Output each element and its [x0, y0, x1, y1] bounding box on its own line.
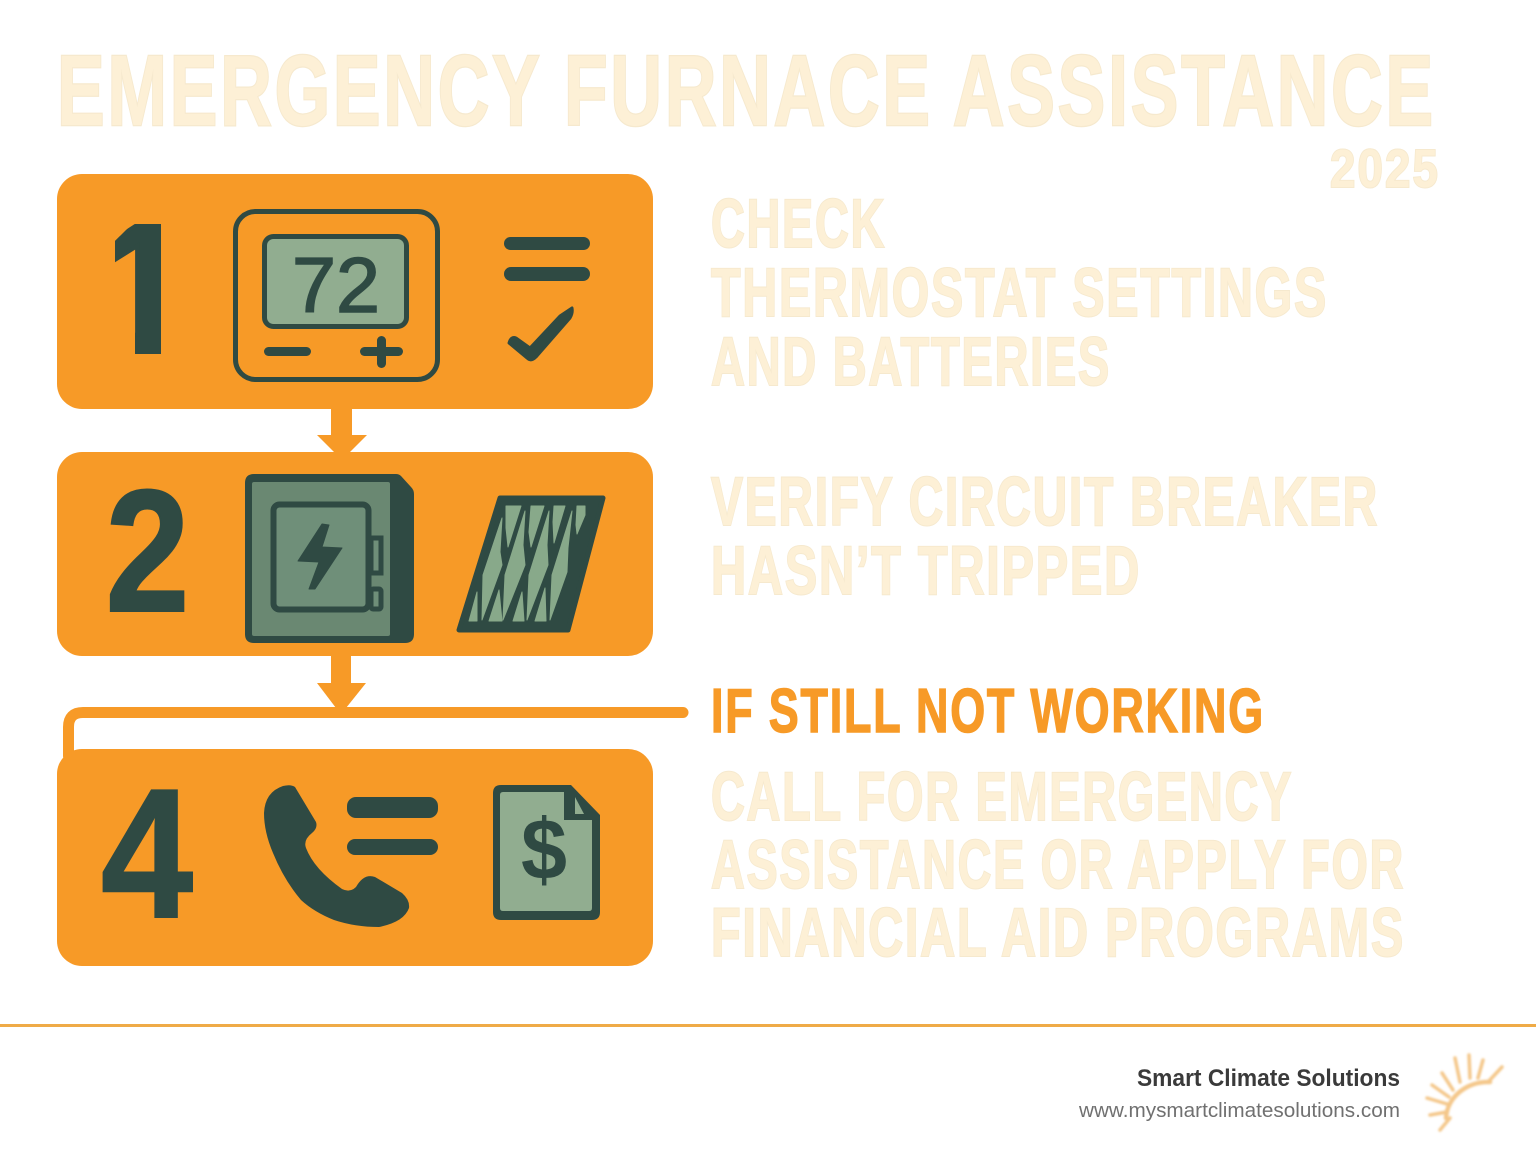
step 2 text: HASN’T TRIPPED [711, 532, 1141, 609]
icon: thermostat: 72 [292, 241, 380, 329]
icon: checklist [504, 237, 590, 360]
panel: step 2 [57, 452, 653, 656]
step 1 text [711, 185, 1328, 400]
step 1 text: AND BATTERIES [711, 323, 1111, 400]
connector line to if still not working [68, 712, 683, 756]
icon: furnace filter [459, 498, 603, 630]
footer website: www.mysmartclimatesolutions.com [1078, 1099, 1400, 1122]
callout: if still not working: IF STILL NOT WORKING [711, 677, 1265, 746]
step 2 text [711, 463, 1379, 609]
number 1: 1 [93, 184, 198, 395]
icon: thermostat [236, 212, 438, 380]
number 2: 2 [106, 453, 190, 648]
arrow: step 1 to step 2 [317, 405, 367, 452]
footer company name: Smart Climate Solutions [1137, 1065, 1400, 1092]
arrow: step 2 to connector [317, 652, 366, 708]
icon: sun logo [1427, 1055, 1502, 1130]
icon: financial aid document: $ [521, 802, 567, 898]
year: 2025 [1330, 139, 1440, 199]
step 1 text: CHECK [711, 185, 886, 262]
number 4: 4 [101, 750, 193, 956]
icon: financial aid document [493, 785, 600, 920]
step 4 text [711, 758, 1405, 971]
panel: step 1 [57, 174, 653, 409]
icon: breaker box [245, 474, 414, 643]
panel: step 4 [57, 749, 653, 966]
icon: phone with lines [264, 785, 438, 927]
